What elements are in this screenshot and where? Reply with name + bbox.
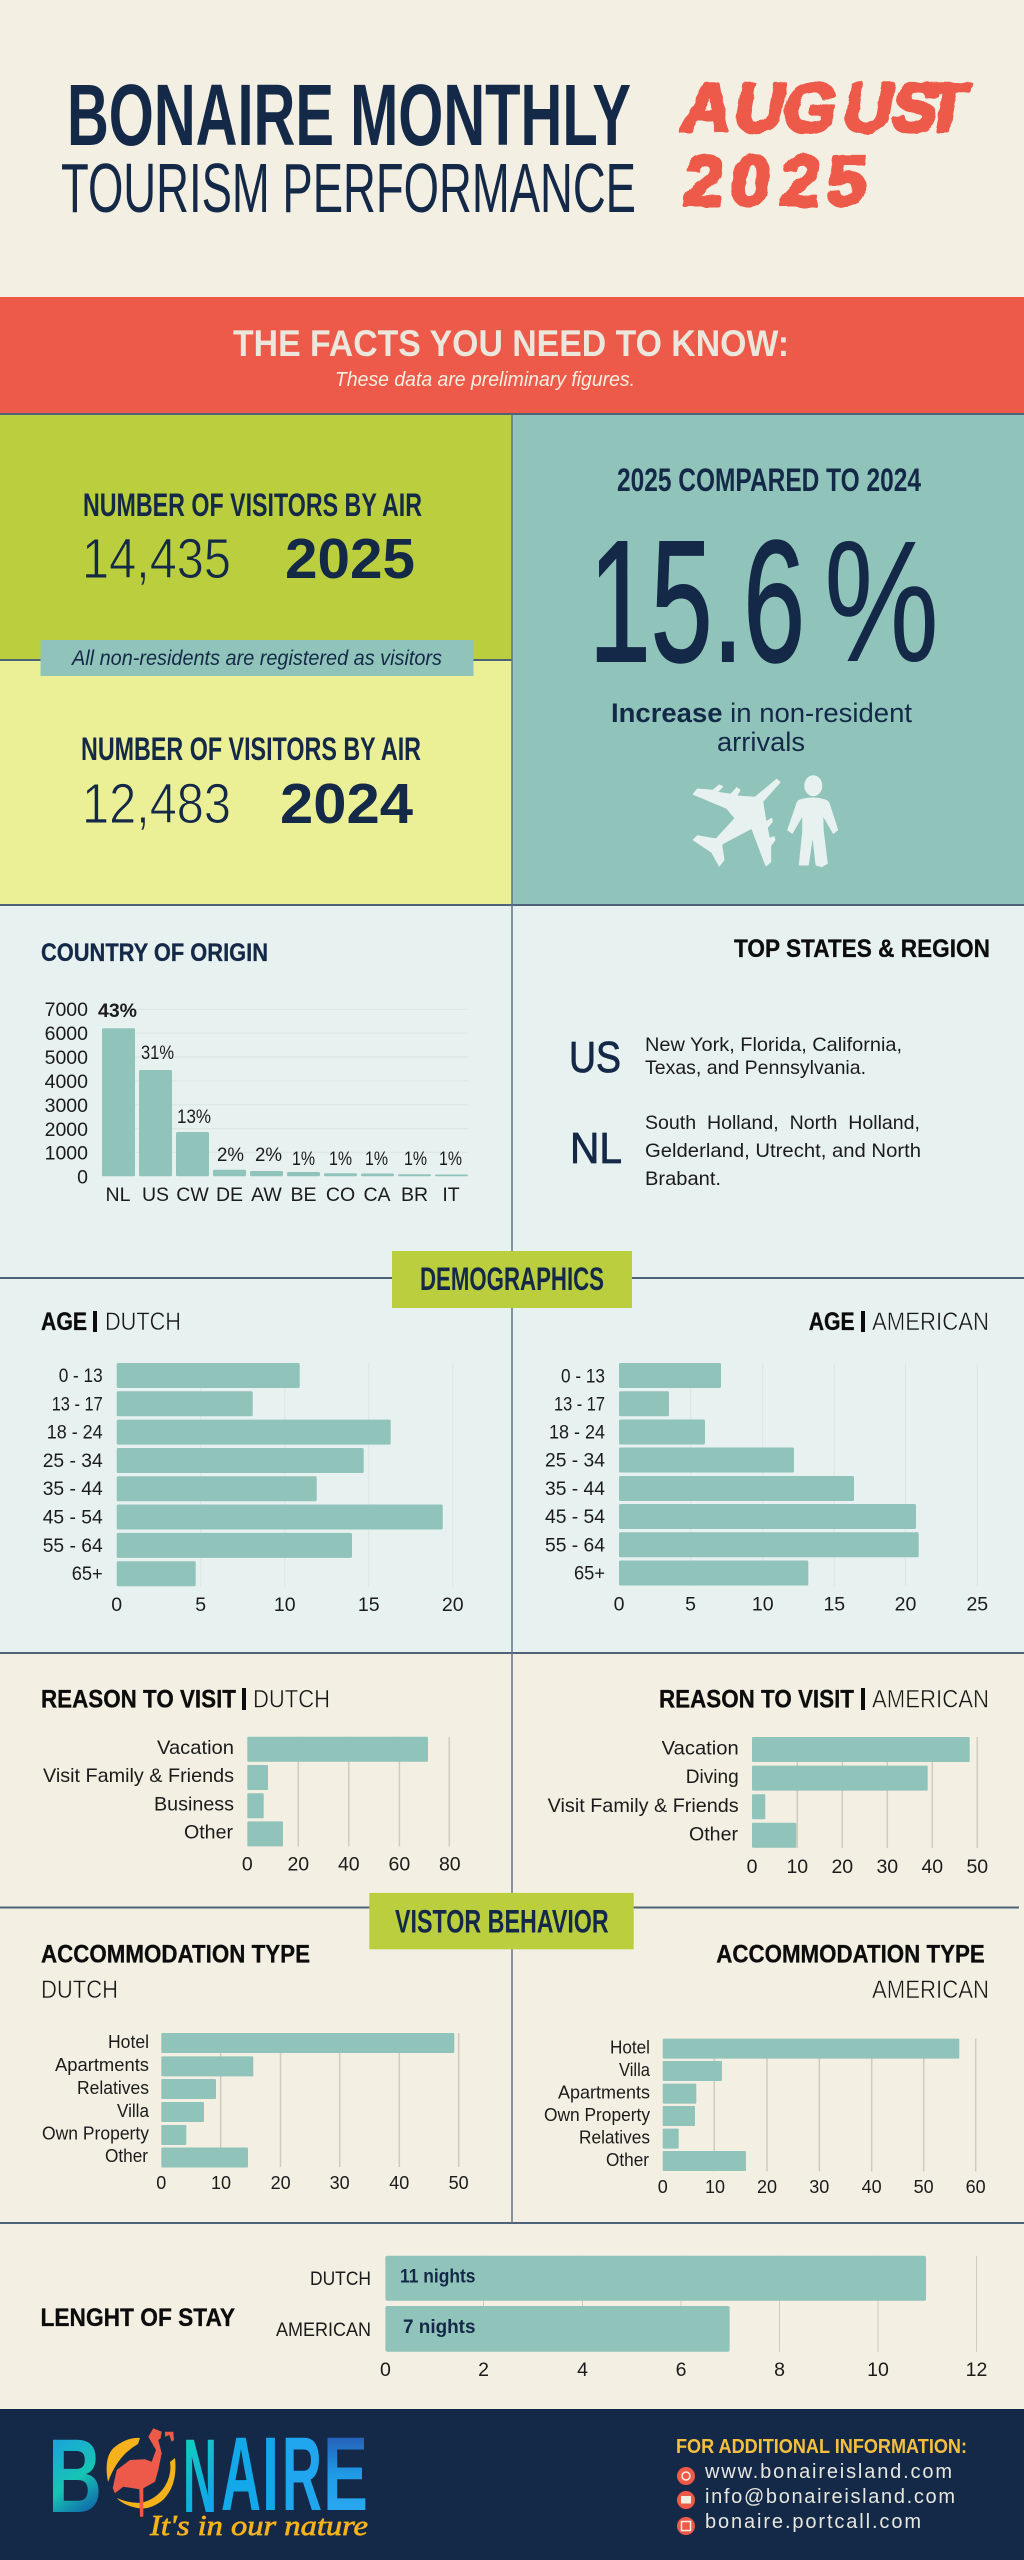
bar chart: accommodation dutch: 20 bbox=[271, 2173, 291, 2193]
panel: visitors 2025: 2025 bbox=[285, 527, 415, 591]
text block: US states: New York, Florida, California, bbox=[645, 1034, 902, 1056]
increase caption: arrivals bbox=[717, 727, 805, 757]
bar chart: accommodation dutch: 30 bbox=[330, 2173, 350, 2193]
bar chart: length of stay bbox=[276, 2256, 987, 2381]
section label: demographics: DEMOGRAPHICS bbox=[420, 1261, 604, 1297]
bar chart: accommodation american: 50 bbox=[914, 2177, 934, 2197]
logo: Bonaire: R bbox=[282, 2416, 322, 2533]
section label: demographics bbox=[392, 1251, 632, 1308]
bar chart: length of stay: 6 bbox=[676, 2359, 686, 2381]
bar chart: accommodation american: Hotel bbox=[610, 2038, 650, 2058]
bar chart: reason to visit dutch: 80 bbox=[439, 1854, 461, 1876]
date heading: AUGUST bbox=[676, 69, 975, 146]
bar chart: reason to visit american: 30 bbox=[876, 1856, 898, 1878]
panel: visitors 2025 bbox=[0, 414, 512, 660]
bar chart: length of stay: 10 bbox=[867, 2359, 889, 2381]
bar chart: country of origin: 1000 bbox=[45, 1142, 88, 1164]
bar chart: age dutch: 13 - 17 bbox=[52, 1393, 103, 1415]
bar chart: country of origin: 1% bbox=[365, 1148, 388, 1170]
bar chart: country of origin bbox=[45, 999, 468, 1206]
bar chart: age dutch: 20 bbox=[442, 1594, 464, 1616]
text block: US states bbox=[569, 1033, 902, 1082]
bar chart: country of origin: 43% bbox=[98, 1000, 137, 1022]
heading: age american bbox=[809, 1308, 989, 1336]
bar chart: age american: 25 - 34 bbox=[545, 1450, 605, 1472]
bar chart: length of stay: AMERICAN bbox=[276, 2319, 371, 2341]
panel: visitors 2024 bbox=[0, 660, 512, 905]
bar chart: accommodation dutch: 50 bbox=[449, 2173, 469, 2193]
heading: reason to visit dutch: DUTCH bbox=[253, 1686, 330, 1714]
icon: airplane bbox=[693, 779, 780, 866]
bar chart: reason to visit american: Diving bbox=[686, 1766, 739, 1788]
bar chart: reason to visit american: 0 bbox=[747, 1856, 758, 1878]
callout: non-residents note bbox=[40, 640, 474, 676]
bar chart: country of origin: NL bbox=[106, 1184, 131, 1206]
bar chart: reason to visit american: Visit Family & Friends bbox=[548, 1795, 739, 1817]
heading: age dutch: DUTCH bbox=[105, 1308, 181, 1336]
bar chart: country of origin: 7000 bbox=[45, 999, 88, 1021]
heading: accommodation dutch bbox=[41, 1940, 310, 2004]
text block: NL regions: NL bbox=[570, 1124, 622, 1173]
bar chart: age dutch: 45 - 54 bbox=[43, 1506, 103, 1528]
panel background: origin and demographics bbox=[0, 906, 1024, 1653]
logo: Bonaire: It's in our nature bbox=[149, 2511, 368, 2542]
heading: accommodation american: AMERICAN bbox=[872, 1976, 989, 2004]
bar chart: reason to visit american bbox=[548, 1737, 988, 1878]
bar chart: country of origin: 2000 bbox=[45, 1119, 88, 1141]
heading: top states and region: TOP STATES & REGION bbox=[734, 935, 990, 963]
bar chart: age american: 5 bbox=[685, 1594, 696, 1616]
heading: age dutch bbox=[41, 1308, 181, 1336]
text block: NL regions bbox=[570, 1112, 921, 1190]
heading: age dutch: AGE bbox=[41, 1308, 87, 1336]
panel: visitors 2024: 2024 bbox=[280, 772, 413, 836]
bar chart: country of origin: 3000 bbox=[45, 1095, 88, 1117]
panel: visitors 2024: 12,483 bbox=[82, 772, 231, 836]
bar chart: reason to visit dutch: 0 bbox=[242, 1854, 253, 1876]
panel: visitors 2025: NUMBER OF VISITORS BY AIR bbox=[83, 487, 422, 523]
bar chart: age american: 10 bbox=[752, 1594, 774, 1616]
bar chart: accommodation american: Own Property bbox=[544, 2105, 650, 2125]
bar chart: country of origin: US bbox=[142, 1184, 169, 1206]
bar chart: country of origin: 2% bbox=[217, 1144, 244, 1166]
section label: visitor behavior bbox=[369, 1893, 634, 1949]
logo: Bonaire: N bbox=[183, 2418, 217, 2535]
text block: NL regions: Gelderland, Utrecht, and North bbox=[645, 1140, 921, 1162]
bar chart: country of origin: 4000 bbox=[45, 1071, 88, 1093]
heading: age american: AMERICAN bbox=[872, 1308, 989, 1336]
title block: BONAIRE MONTHLY bbox=[67, 67, 631, 164]
heading: reason to visit dutch: REASON TO VISIT bbox=[41, 1686, 236, 1714]
big percentage: 15.6 bbox=[589, 504, 805, 698]
bar chart: accommodation american: 60 bbox=[966, 2177, 986, 2197]
bar chart: country of origin: AW bbox=[251, 1184, 282, 1206]
bar chart: age american: 25 bbox=[966, 1594, 988, 1616]
bar chart: accommodation american: 30 bbox=[809, 2177, 829, 2197]
big percentage: % bbox=[824, 504, 939, 698]
logo: Bonaire: B bbox=[48, 2418, 102, 2535]
heading: accommodation dutch: DUTCH bbox=[41, 1976, 118, 2004]
bar chart: country of origin: 1% bbox=[329, 1148, 352, 1170]
banner: facts you need to know: These data are preliminary figures. bbox=[335, 369, 635, 391]
bar chart: country of origin: CW bbox=[176, 1184, 209, 1206]
bar chart: length of stay: 0 bbox=[380, 2359, 391, 2381]
bar chart: length of stay: 7 nights bbox=[403, 2317, 476, 2338]
logo: Bonaire: A bbox=[221, 2416, 261, 2533]
bar chart: accommodation dutch: Own Property bbox=[42, 2124, 149, 2144]
divider lines bbox=[0, 414, 1024, 2223]
bar chart: country of origin: CO bbox=[326, 1184, 355, 1206]
bar chart: accommodation dutch: Apartments bbox=[55, 2055, 149, 2075]
bar chart: accommodation american: 0 bbox=[658, 2177, 668, 2197]
text block: US states: US bbox=[569, 1033, 621, 1082]
bar chart: age dutch: 10 bbox=[274, 1594, 296, 1616]
section label: visitor behavior: VISTOR BEHAVIOR bbox=[395, 1904, 609, 1940]
bar chart: accommodation american: Other bbox=[606, 2150, 649, 2170]
bar chart: reason to visit dutch bbox=[43, 1737, 461, 1876]
bar chart: age dutch: 15 bbox=[358, 1594, 380, 1616]
bar chart: accommodation american bbox=[544, 2038, 986, 2197]
bar chart: reason to visit american: 50 bbox=[966, 1856, 988, 1878]
bar chart: accommodation american: 40 bbox=[862, 2177, 882, 2197]
panel: 2025 compared to 2024 bbox=[512, 414, 1024, 905]
bar chart: age american: 55 - 64 bbox=[545, 1534, 605, 1556]
bar chart: age dutch: 35 - 44 bbox=[43, 1478, 103, 1500]
bar chart: length of stay: 8 bbox=[774, 2359, 785, 2381]
contact: website: www.bonaireisland.com bbox=[704, 2461, 952, 2483]
bar chart: accommodation dutch: 10 bbox=[211, 2173, 231, 2193]
bar chart: accommodation american: 20 bbox=[757, 2177, 777, 2197]
text block: NL regions: South Holland, North Holland, bbox=[645, 1112, 920, 1134]
contact: email: info@bonaireisland.com bbox=[705, 2486, 955, 2508]
heading: accommodation american bbox=[716, 1940, 989, 2004]
bar chart: country of origin: IT bbox=[442, 1184, 460, 1206]
bar chart: country of origin: 5000 bbox=[45, 1047, 88, 1069]
heading: accommodation american: ACCOMMODATION TYPE bbox=[716, 1940, 985, 1968]
bar chart: age dutch: 0 bbox=[111, 1594, 122, 1616]
bar chart: reason to visit dutch: Other bbox=[184, 1822, 233, 1844]
bar chart: age american bbox=[545, 1363, 988, 1616]
bar chart: accommodation dutch: Other bbox=[105, 2146, 148, 2166]
contact heading: FOR ADDITIONAL INFORMATION: bbox=[676, 2436, 967, 2458]
logo: Bonaire bbox=[48, 2416, 368, 2542]
text block: US states: Texas, and Pennsylvania. bbox=[645, 1057, 866, 1079]
title block: TOURISM PERFORMANCE bbox=[61, 149, 636, 227]
panel: 2025 compared to 2024: 2025 COMPARED TO 2024 bbox=[617, 462, 921, 498]
bar chart: accommodation american: Relatives bbox=[579, 2128, 650, 2148]
bar chart: accommodation american: 10 bbox=[705, 2177, 725, 2197]
bar chart: country of origin: 1% bbox=[439, 1148, 462, 1170]
bar chart: age dutch: 0 - 13 bbox=[59, 1365, 103, 1387]
bar chart: country of origin: 1% bbox=[292, 1148, 315, 1170]
bar chart: reason to visit american: Vacation bbox=[662, 1738, 739, 1760]
bar chart: accommodation dutch: Hotel bbox=[108, 2032, 149, 2052]
heading: reason to visit american: AMERICAN bbox=[872, 1686, 989, 1714]
bar chart: accommodation dutch: 40 bbox=[389, 2173, 409, 2193]
heading: reason to visit american bbox=[659, 1686, 989, 1714]
footer bbox=[0, 2409, 1024, 2560]
bar chart: age dutch: 25 - 34 bbox=[43, 1450, 103, 1472]
bar chart: country of origin: 31% bbox=[141, 1042, 174, 1064]
bar chart: accommodation dutch: Relatives bbox=[77, 2078, 149, 2098]
text block: NL regions: Brabant. bbox=[645, 1168, 721, 1190]
heading: length of stay: LENGHT OF STAY bbox=[40, 2304, 235, 2332]
bar chart: accommodation american: Apartments bbox=[558, 2083, 650, 2103]
bar chart: age american: 45 - 54 bbox=[545, 1506, 605, 1528]
bar chart: country of origin: 0 bbox=[77, 1166, 88, 1188]
bar chart: country of origin: BE bbox=[290, 1184, 317, 1206]
heading: reason to visit american: REASON TO VISIT bbox=[659, 1686, 854, 1714]
bar chart: country of origin: DE bbox=[216, 1184, 243, 1206]
bar chart: length of stay: 12 bbox=[966, 2359, 987, 2381]
heading: age american: AGE bbox=[809, 1308, 855, 1336]
date heading: 2025 bbox=[680, 141, 871, 220]
bar chart: length of stay: DUTCH bbox=[310, 2268, 371, 2290]
bar chart: reason to visit american: Other bbox=[689, 1823, 738, 1845]
bar chart: length of stay: 4 bbox=[577, 2359, 588, 2381]
bar chart: age dutch: 65+ bbox=[72, 1563, 103, 1585]
bar chart: country of origin: 6000 bbox=[45, 1023, 88, 1045]
bar chart: reason to visit american: 40 bbox=[921, 1856, 943, 1878]
bar chart: age dutch: 18 - 24 bbox=[47, 1422, 103, 1444]
bar chart: age dutch: 5 bbox=[195, 1594, 206, 1616]
increase caption: Increase in non-resident bbox=[611, 698, 912, 728]
bar chart: age american: 20 bbox=[895, 1594, 916, 1616]
icon: person bbox=[788, 775, 838, 867]
banner: facts you need to know: THE FACTS YOU NEED TO KNOW: bbox=[233, 323, 789, 364]
bar chart: reason to visit dutch: Business bbox=[154, 1794, 234, 1816]
bar chart: country of origin: 13% bbox=[177, 1106, 211, 1128]
bar chart: country of origin: 2% bbox=[255, 1144, 282, 1166]
bar chart: accommodation dutch: Villa bbox=[117, 2101, 150, 2121]
panel: visitors 2025: 14,435 bbox=[82, 527, 231, 591]
logo: Bonaire: I bbox=[262, 2416, 279, 2533]
bar chart: accommodation american: Villa bbox=[619, 2060, 651, 2080]
logo: Bonaire: E bbox=[323, 2416, 368, 2533]
bar chart: accommodation dutch: 0 bbox=[156, 2173, 166, 2193]
title block bbox=[61, 67, 636, 227]
bar chart: length of stay: 11 nights bbox=[400, 2267, 476, 2288]
heading: country of origin: COUNTRY OF ORIGIN bbox=[41, 939, 268, 967]
banner: facts you need to know bbox=[0, 297, 1024, 413]
bar chart: age american: 13 - 17 bbox=[554, 1394, 605, 1416]
bar chart: age dutch bbox=[43, 1363, 464, 1616]
bar chart: reason to visit dutch: 60 bbox=[389, 1854, 410, 1876]
contact: portcall: bonaire.portcall.com bbox=[705, 2511, 921, 2533]
bar chart: reason to visit dutch: 40 bbox=[338, 1854, 360, 1876]
bar chart: age american: 15 bbox=[823, 1594, 845, 1616]
bar chart: age american: 18 - 24 bbox=[549, 1422, 605, 1444]
bar chart: reason to visit american: 10 bbox=[786, 1856, 808, 1878]
bar chart: age american: 65+ bbox=[574, 1562, 605, 1584]
bar chart: accommodation dutch bbox=[42, 2032, 469, 2193]
bar chart: country of origin: 1% bbox=[404, 1148, 427, 1170]
bar chart: age american: 0 - 13 bbox=[561, 1366, 605, 1388]
bar chart: reason to visit dutch: 20 bbox=[287, 1854, 309, 1876]
heading: accommodation dutch: ACCOMMODATION TYPE bbox=[41, 1940, 310, 1968]
date heading bbox=[676, 69, 975, 220]
callout: non-residents note: All non-residents are registered as visitors bbox=[70, 647, 442, 670]
bar chart: reason to visit american: 20 bbox=[831, 1856, 853, 1878]
bar chart: country of origin: BR bbox=[401, 1184, 428, 1206]
panel: visitors 2024: NUMBER OF VISITORS BY AIR bbox=[81, 731, 421, 767]
bar chart: reason to visit dutch: Vacation bbox=[157, 1737, 234, 1759]
bar chart: reason to visit dutch: Visit Family & Friends bbox=[43, 1765, 234, 1787]
bar chart: age american: 0 bbox=[614, 1594, 625, 1616]
bar chart: length of stay: 2 bbox=[478, 2359, 489, 2381]
increase caption bbox=[611, 698, 912, 757]
bar chart: age dutch: 55 - 64 bbox=[43, 1535, 103, 1557]
bar chart: age american: 35 - 44 bbox=[545, 1478, 605, 1500]
bar chart: country of origin: CA bbox=[363, 1184, 391, 1206]
